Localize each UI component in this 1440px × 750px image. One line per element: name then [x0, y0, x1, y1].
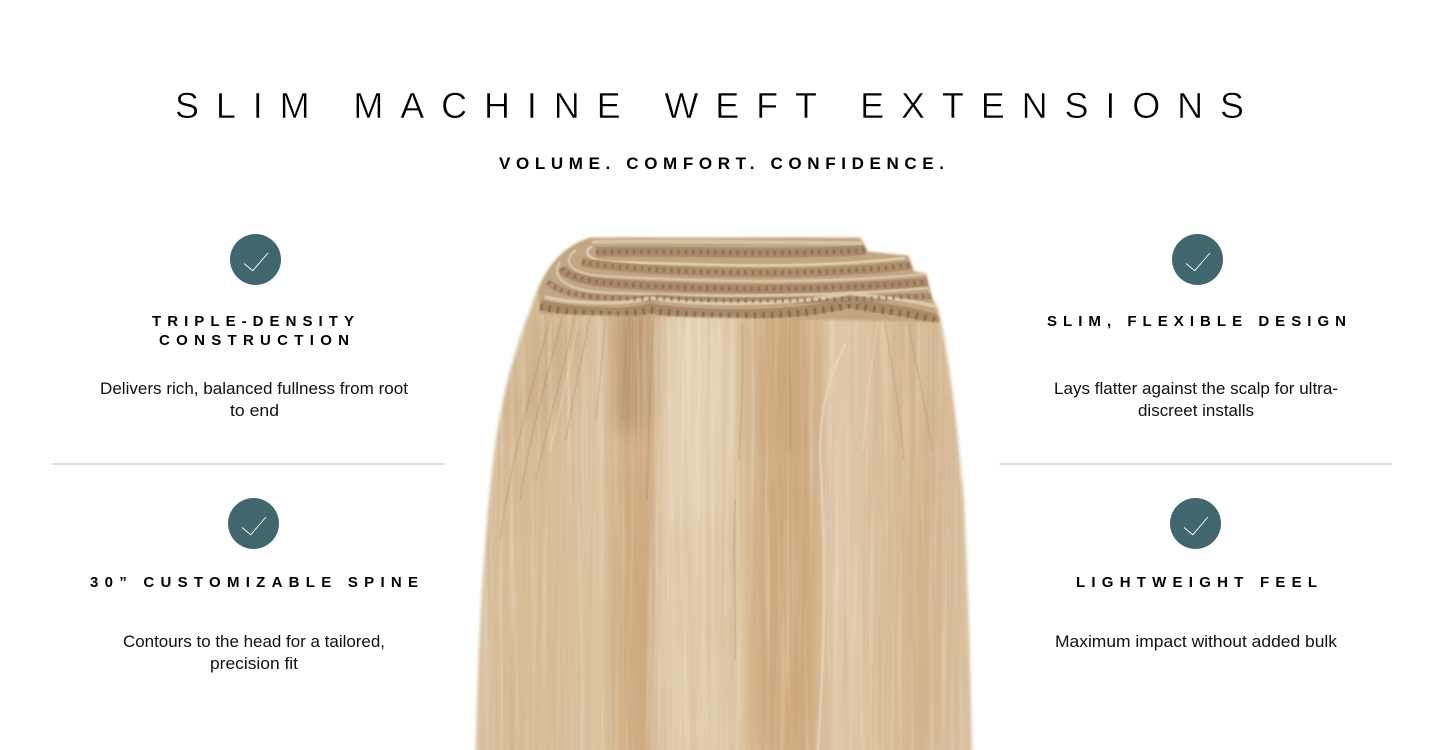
body text: to end [230, 402, 279, 420]
body text [100, 380, 408, 420]
icon: check circle [228, 498, 279, 549]
body text: Contours to the head for a tailored, [123, 633, 385, 651]
icon: check circle [1172, 234, 1223, 285]
heading: CONSTRUCTION [159, 332, 349, 349]
hair weft image [460, 228, 990, 750]
title: SLIM MACHINE WEFT EXTENSIONS [175, 85, 1244, 126]
heading [152, 313, 354, 349]
heading: TRIPLE-DENSITY [152, 313, 354, 330]
body text: Lays flatter against the scalp for ultra- [1054, 380, 1338, 398]
heading: 30” CUSTOMIZABLE SPINE [90, 574, 418, 591]
body text: precision fit [210, 655, 298, 673]
body text [1054, 380, 1338, 420]
icon: check circle [1170, 498, 1221, 549]
feature: triple-density construction [100, 234, 408, 420]
subtitle: VOLUME. COMFORT. CONFIDENCE. [499, 154, 944, 173]
fine hair streaks [664, 319, 832, 750]
heading: LIGHTWEIGHT FEEL [1076, 574, 1317, 591]
hair strands [500, 312, 932, 750]
feature: 30 inch customizable spine [90, 498, 418, 673]
feature: slim, flexible design [1047, 234, 1346, 420]
body text [123, 633, 385, 673]
weft rows [537, 236, 941, 323]
heading: SLIM, FLEXIBLE DESIGN [1047, 313, 1346, 330]
body text: Maximum impact without added bulk [1055, 633, 1338, 651]
icon: check circle [230, 234, 281, 285]
hair colour shading [526, 316, 718, 514]
light highlight strand [818, 345, 845, 750]
feature: lightweight feel [1055, 498, 1338, 651]
body text: discreet installs [1138, 402, 1254, 420]
body text: Delivers rich, balanced fullness from root [100, 380, 408, 398]
